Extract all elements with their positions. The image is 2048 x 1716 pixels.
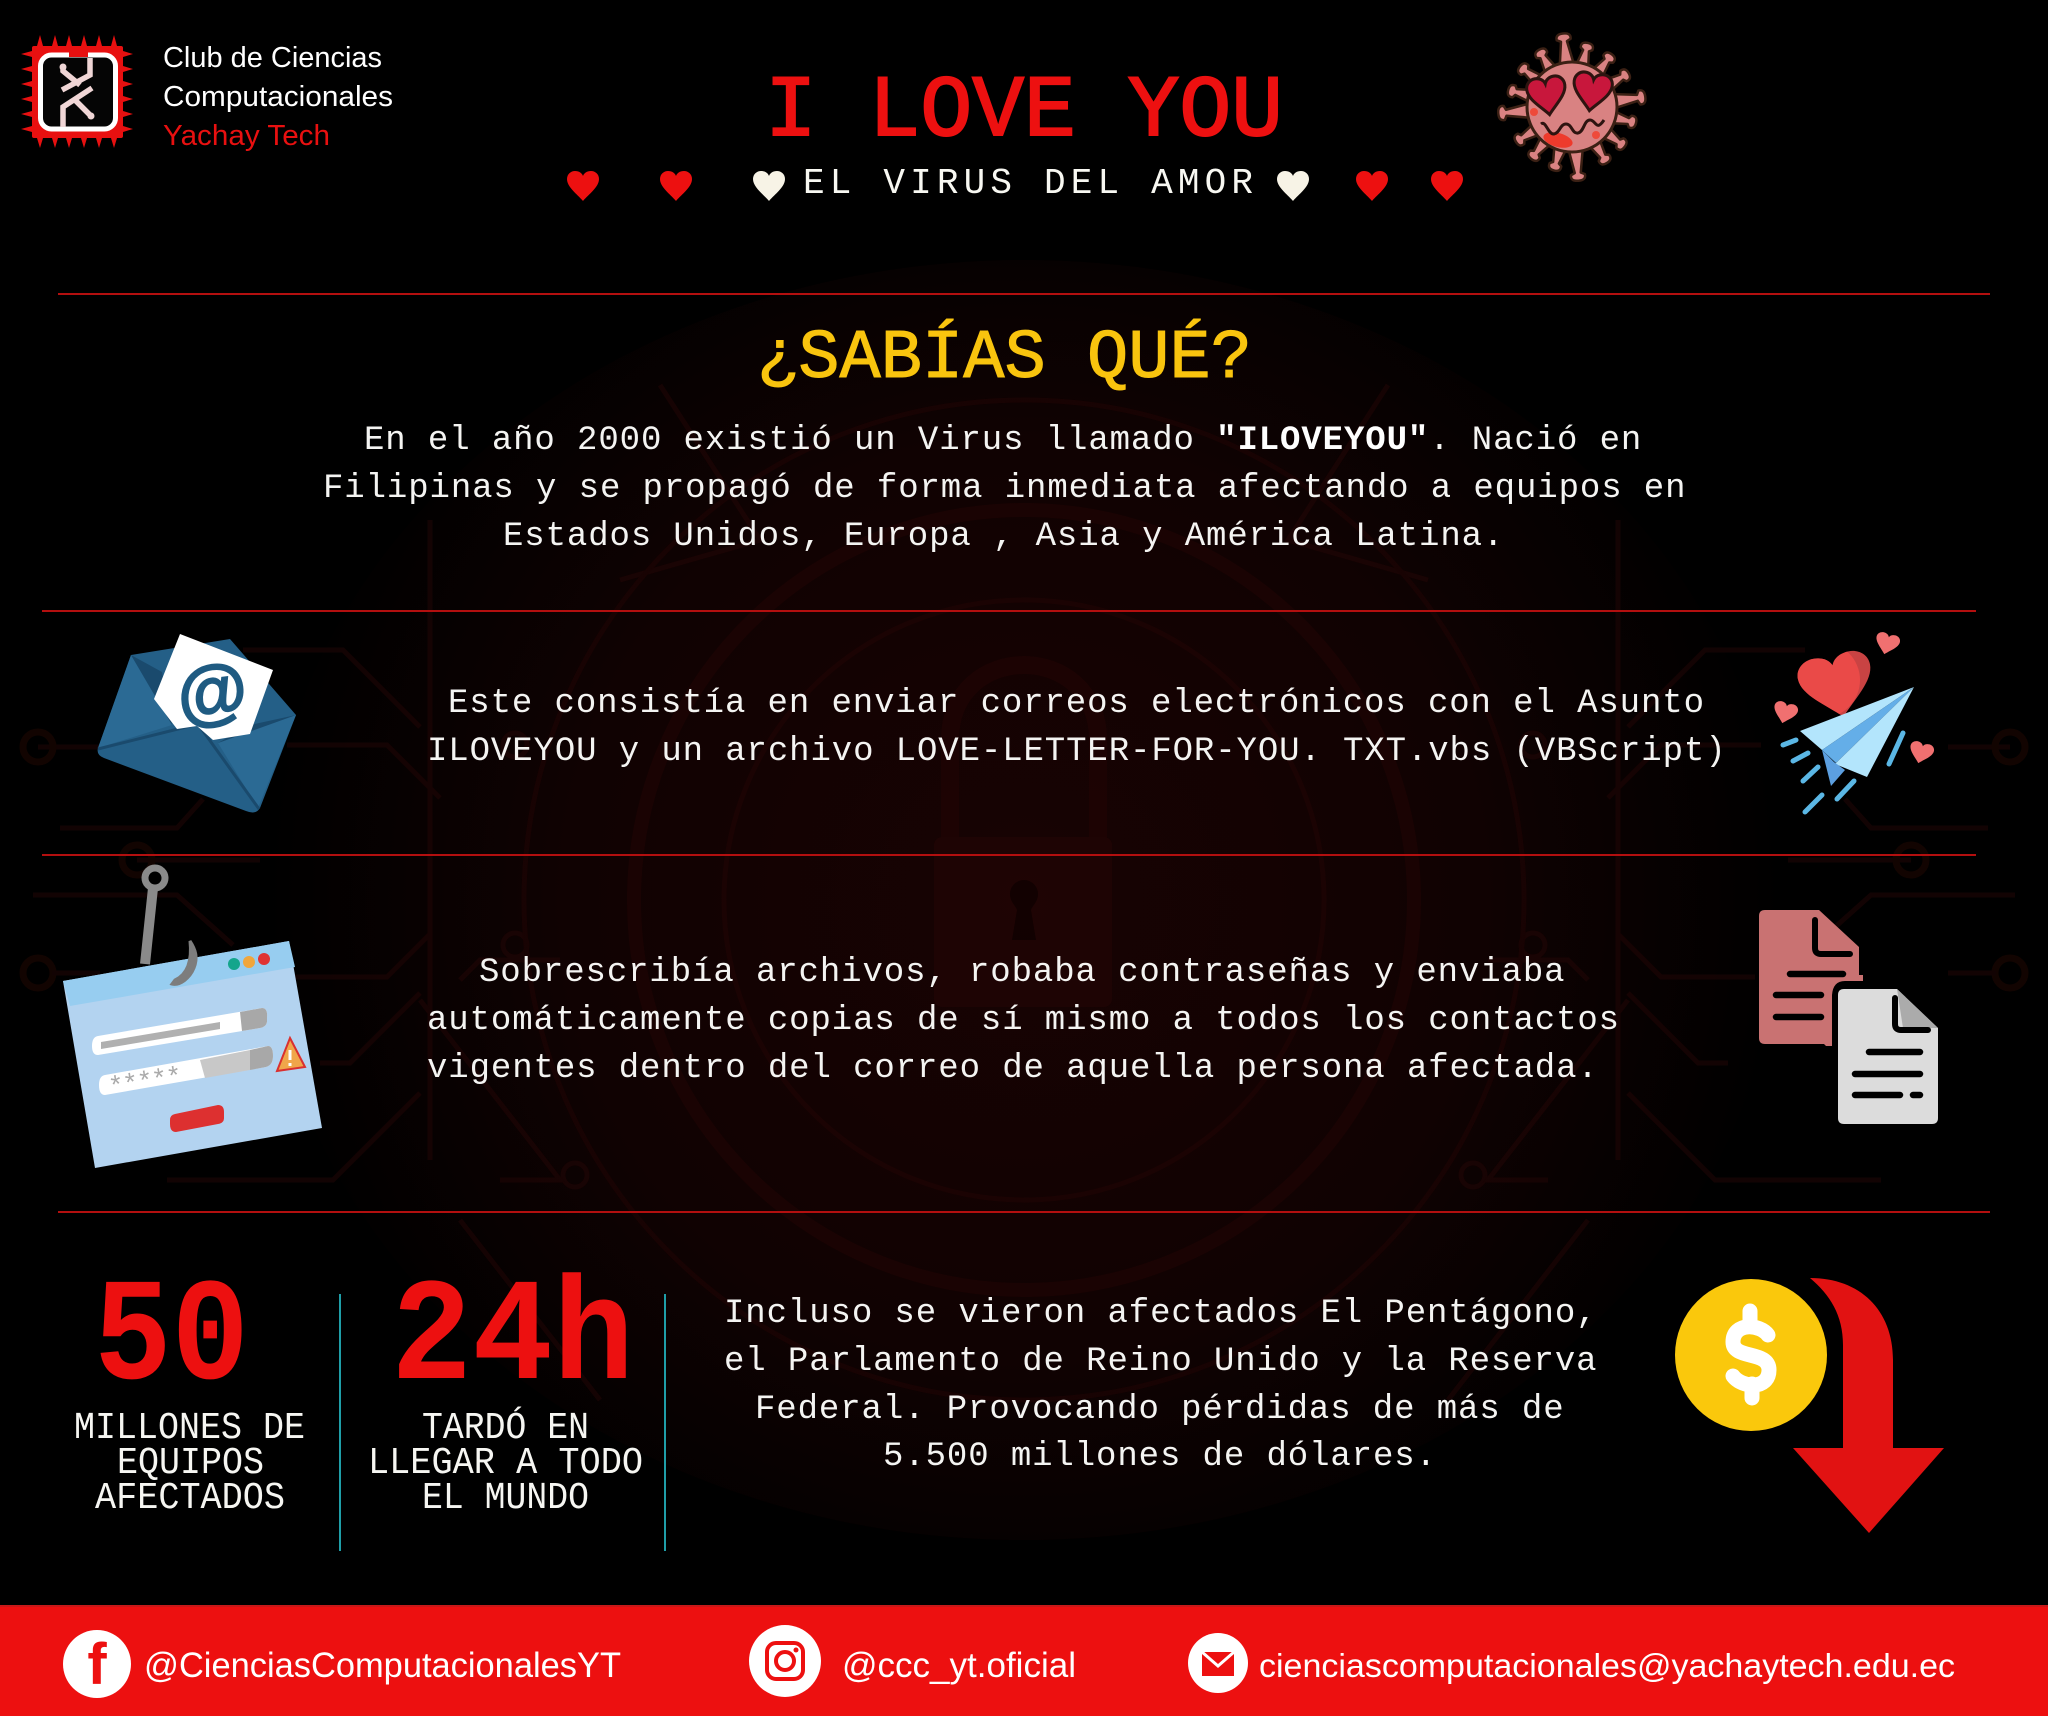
text block: damage description: Sobrescribía archivos, robaba contraseñas y enviaba bbox=[479, 954, 1565, 992]
club name text: Yachay Tech bbox=[163, 120, 330, 152]
stat: 24h bbox=[368, 1256, 643, 1520]
icon: virus with heart eyes bbox=[1498, 33, 1646, 181]
text block: affected institutions: Federal. Provocando pérdidas de más de bbox=[755, 1391, 1565, 1429]
text block: affected institutions: el Parlamento de Reino Unido y la Reserva bbox=[724, 1343, 1597, 1381]
stat: 50 million: 50 bbox=[94, 1256, 249, 1422]
stat: 24h: LLEGAR A TODO bbox=[368, 1442, 643, 1485]
text block: intro: Filipinas y se propagó de forma inmediata afectando a equipos en bbox=[323, 470, 1686, 508]
facebook contact: @CienciasComputacionalesYT bbox=[144, 1646, 621, 1685]
club name text: Club de Ciencias bbox=[163, 42, 382, 74]
facebook contact bbox=[63, 1630, 621, 1698]
stat: 24h: TARDÓ EN bbox=[422, 1405, 589, 1450]
instagram contact bbox=[749, 1625, 1076, 1697]
club name text bbox=[163, 42, 393, 152]
stat: 50 million: MILLONES DE bbox=[74, 1407, 305, 1450]
footer bar bbox=[0, 1605, 2048, 1716]
icon: dollar coin bbox=[1675, 1279, 1827, 1431]
logo: club chip icon bbox=[21, 35, 133, 148]
icon: email envelope bbox=[98, 634, 296, 812]
text block: damage description: vigentes dentro del correo de aquella persona afectada. bbox=[427, 1050, 1599, 1088]
icon: copied documents bbox=[1759, 910, 1938, 1124]
icon: phishing hook and login window: ***** bbox=[107, 1062, 183, 1103]
stat dividers bbox=[339, 1294, 666, 1551]
subtitle: EL VIRUS DEL AMOR bbox=[803, 163, 1253, 204]
text block: intro: Estados Unidos, Europa , Asia y América Latina. bbox=[503, 518, 1504, 556]
stat: 24h: 24h bbox=[391, 1256, 634, 1422]
email contact bbox=[1188, 1633, 1955, 1693]
background circuit and lock pattern bbox=[23, 260, 2025, 1540]
text block: email description bbox=[427, 685, 1727, 771]
divider lines bbox=[42, 293, 1990, 1213]
icon: email envelope: @ bbox=[172, 648, 252, 736]
stat: 50 million bbox=[74, 1256, 305, 1520]
text block: intro: En el año 2000 existió un Virus llamado "ILOVEYOU". Nació en bbox=[364, 422, 1642, 460]
text block: affected institutions: 5.500 millones de dólares. bbox=[883, 1438, 1437, 1476]
title: I LOVE YOU bbox=[765, 64, 1283, 162]
stat: 24h: EL MUNDO bbox=[422, 1477, 589, 1520]
instagram contact: @ccc_yt.oficial bbox=[842, 1646, 1076, 1685]
text block: affected institutions: Incluso se vieron afectados El Pentágono, bbox=[724, 1295, 1597, 1333]
hearts row bbox=[567, 171, 1463, 201]
text block: damage description: automáticamente copias de sí mismo a todos los contactos bbox=[427, 1002, 1620, 1040]
stat: 50 million: EQUIPOS bbox=[117, 1442, 264, 1485]
icon: paper plane with hearts bbox=[1771, 631, 1935, 812]
arrow: falling value bbox=[1793, 1278, 1944, 1533]
club name text: Computacionales bbox=[163, 81, 393, 113]
stat: 50 million: AFECTADOS bbox=[95, 1477, 285, 1520]
text block: email description: Este consistía en enviar correos electrónicos con el Asunto bbox=[448, 685, 1705, 723]
heading: ¿SABÍAS QUÉ? bbox=[757, 318, 1252, 399]
text block: affected institutions bbox=[724, 1295, 1597, 1476]
email contact: cienciascomputacionales@yachaytech.edu.ec bbox=[1259, 1647, 1955, 1684]
text block: email description: ILOVEYOU y un archivo LOVE-LETTER-FOR-YOU. TXT.vbs (VBScript) bbox=[427, 733, 1727, 771]
icon: phishing hook and login window bbox=[63, 868, 322, 1168]
text block: damage description bbox=[427, 954, 1620, 1088]
facebook contact: f bbox=[87, 1632, 107, 1697]
text block: intro bbox=[323, 422, 1686, 556]
